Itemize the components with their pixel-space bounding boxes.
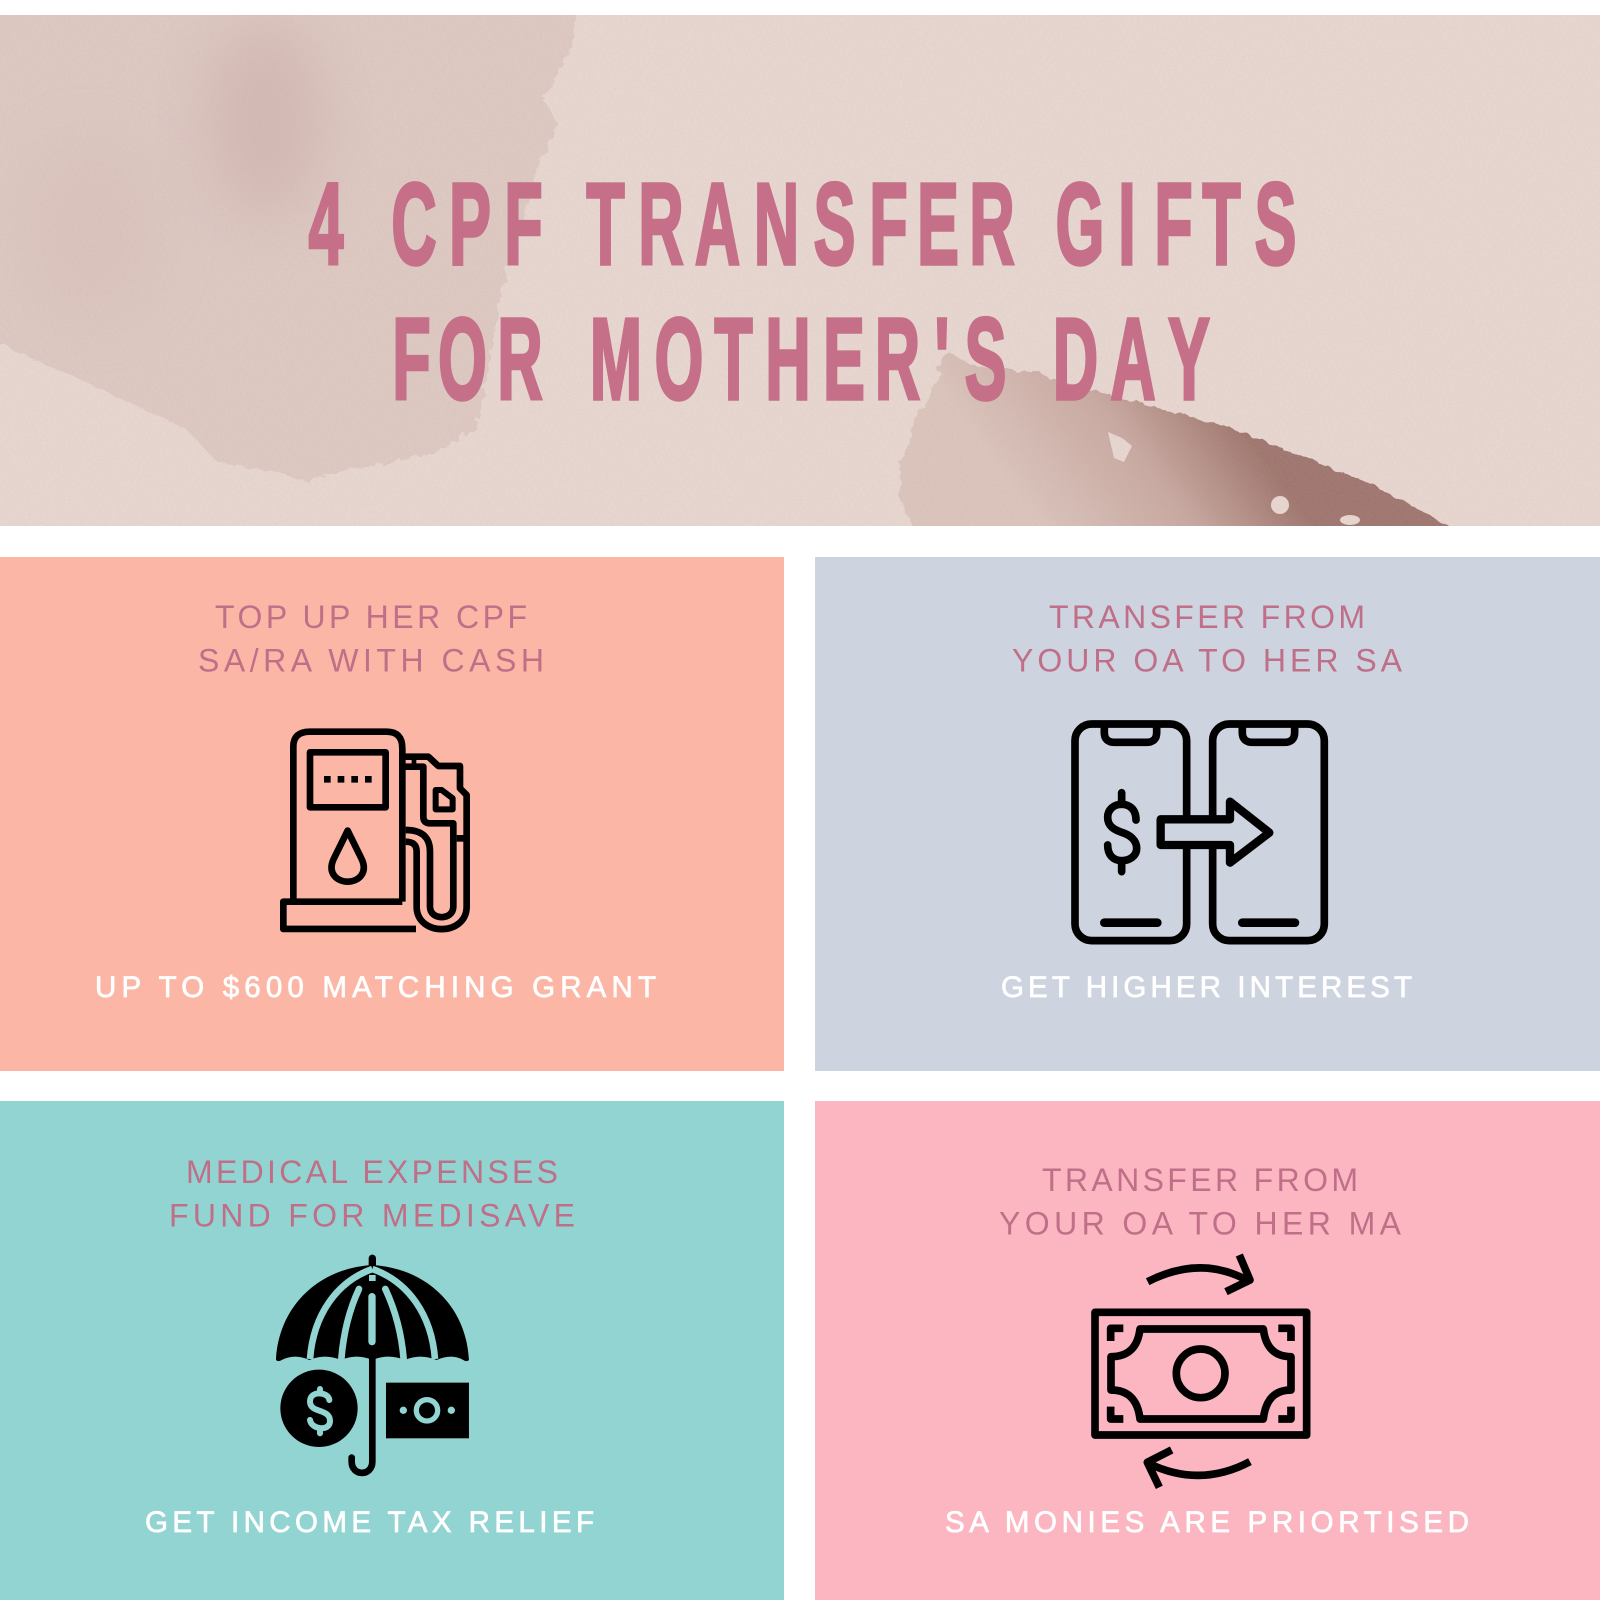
- title: 4 CPF TRANSFER GIFTS: [309, 159, 1296, 289]
- icon: banknote with rotating arrows: [1095, 1255, 1307, 1487]
- icon: fuel pump: [283, 732, 467, 929]
- heading: OA to MA: TRANSFER FROM: [1042, 1162, 1358, 1198]
- title: FOR MOTHER'S DAY: [392, 294, 1210, 424]
- heading: OA to MA: YOUR OA TO HER MA: [999, 1206, 1402, 1242]
- header panel: watercolor banner: [0, 10, 1600, 540]
- heading: top up: SA/RA WITH CASH: [198, 642, 544, 678]
- body text: higher interest: GET HIGHER INTEREST: [1001, 971, 1412, 1004]
- panel: OA to MA: [815, 1101, 1600, 1600]
- heading: top up: [198, 599, 544, 678]
- heading: medical: [169, 1154, 575, 1234]
- heading: OA to SA: [1012, 599, 1403, 678]
- panel: top up cash: [0, 557, 784, 1071]
- title: [309, 159, 1296, 424]
- body text: matching grant: UP TO $600 MATCHING GRANT: [95, 971, 656, 1004]
- body text: SA monies: SA MONIES ARE PRIORTISED: [945, 1506, 1469, 1539]
- heading: medical: MEDICAL EXPENSES: [186, 1154, 558, 1190]
- icon: umbrella with coin and bill: [276, 1258, 469, 1473]
- heading: top up: TOP UP HER CPF: [215, 599, 527, 635]
- heading: OA to MA: [999, 1162, 1402, 1242]
- heading: OA to SA: TRANSFER FROM: [1049, 599, 1365, 635]
- panel: OA to SA: [815, 557, 1600, 1071]
- heading: medical: FUND FOR MEDISAVE: [169, 1198, 575, 1234]
- panel: medical expenses: [0, 1101, 784, 1600]
- icon: phones transfer: [1075, 724, 1324, 941]
- heading: OA to SA: YOUR OA TO HER SA: [1012, 642, 1403, 678]
- body text: tax relief: GET INCOME TAX RELIEF: [145, 1506, 594, 1539]
